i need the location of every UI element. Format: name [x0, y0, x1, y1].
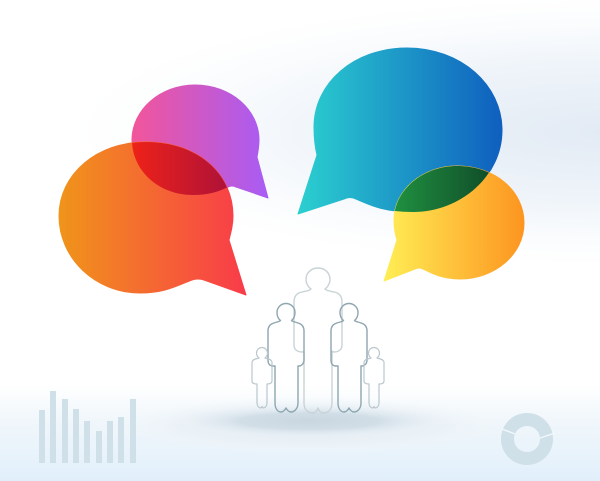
figure: left adult — [268, 304, 304, 412]
figure: right child — [364, 348, 384, 408]
speech bubble: yellow — [384, 166, 524, 281]
speech bubble: purple — [132, 85, 268, 198]
overlap: orange and purple — [132, 142, 227, 195]
figure: left child — [252, 348, 272, 408]
speech bubble: blue — [298, 48, 502, 214]
figure: tall adult — [294, 268, 342, 413]
overlap: blue and yellow — [394, 166, 489, 212]
donut chart — [502, 420, 555, 458]
family outline figures — [252, 268, 384, 413]
bar chart — [39, 391, 136, 463]
speech bubble: orange — [59, 142, 246, 295]
figure: right adult — [331, 304, 367, 412]
